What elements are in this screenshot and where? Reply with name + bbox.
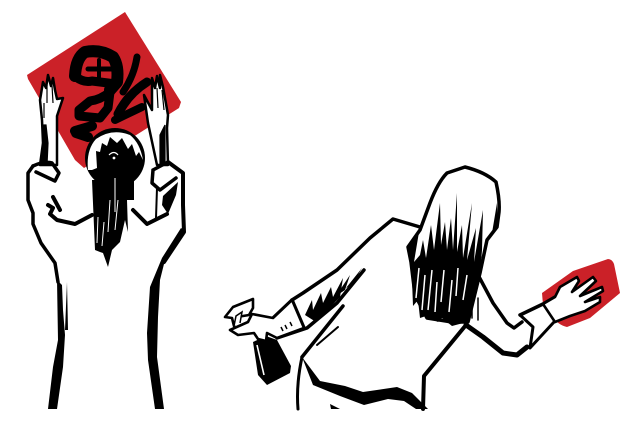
raised right arm and hand [144,75,168,165]
cuff detail [281,322,292,331]
sleeve fold hatching [305,278,343,322]
right sleeve shading [162,182,178,214]
raised left arm and hand [40,75,63,165]
red cloth [542,259,620,327]
spray bottle [225,299,291,385]
right sleeve and body outline [133,162,184,262]
hand on cloth [543,277,603,322]
left sleeve and body outline [28,162,92,282]
hand gripping bottle [230,300,304,341]
waist fold [302,357,428,409]
ponytail [92,178,134,267]
left body thick contour [48,280,68,409]
small fold mark [330,404,340,409]
figure: woman hanging red sign [27,12,184,409]
right body thick contour [147,228,184,409]
right arm reaching to cloth [466,273,555,355]
head and hair [85,128,145,188]
red diamond sign [27,12,181,168]
figure: woman wiping with spray bottle [225,167,620,409]
back and shoulder outline [273,219,466,409]
hair [408,167,499,326]
black calligraphy character [75,51,147,137]
